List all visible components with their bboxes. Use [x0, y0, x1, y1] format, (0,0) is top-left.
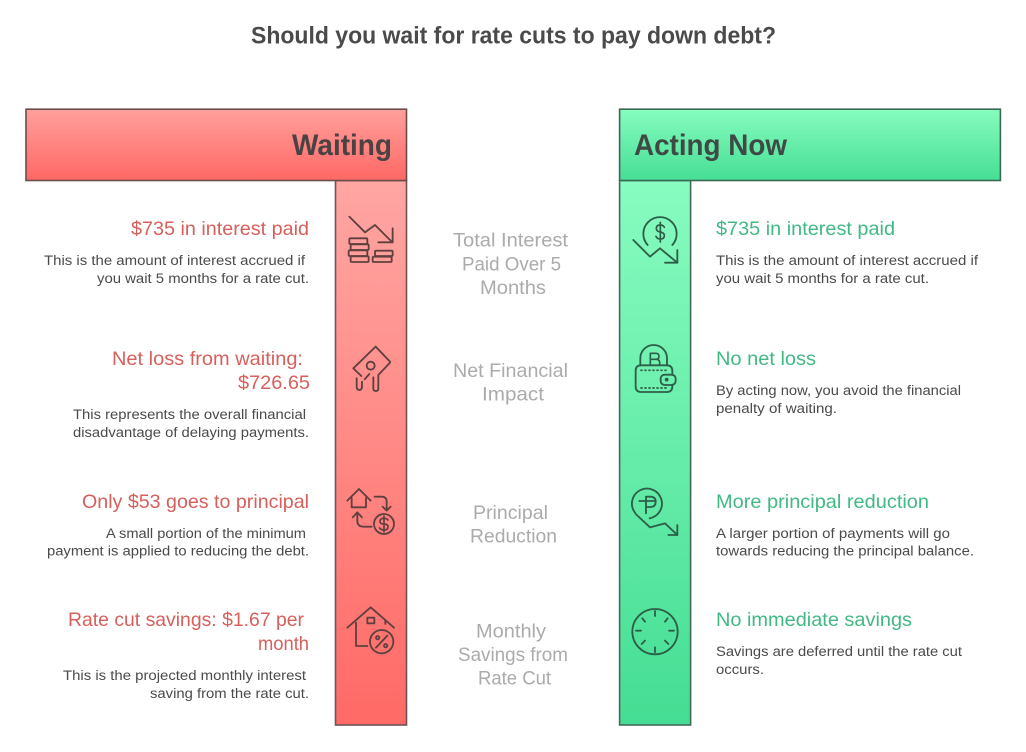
acting item: principal reduction: More principal reduction	[716, 491, 929, 513]
icon: clock face	[632, 609, 678, 654]
icon: house with percent	[347, 607, 394, 653]
waiting item: interest paid: This is the amount of interest accrued if	[44, 253, 305, 269]
center label: net financial impact: Impact	[482, 384, 545, 406]
acting now heading: Acting Now	[634, 129, 788, 162]
acting item: no immediate savings: occurs.	[716, 662, 764, 678]
waiting item: rate cut savings: month	[258, 633, 309, 655]
center label: principal reduction	[470, 502, 557, 548]
waiting item: principal: A small portion of the minimum	[106, 526, 306, 542]
center label: monthly savings: Rate Cut	[478, 668, 552, 690]
center label: principal reduction: Reduction	[470, 526, 557, 548]
acting item: interest paid: This is the amount of interest accrued if	[716, 253, 978, 269]
waiting item: interest paid: $735 in interest paid	[131, 218, 309, 240]
acting item: no net loss: No net loss	[716, 348, 816, 370]
icon: melting banknote	[353, 347, 390, 391]
waiting item: net loss: This represents the overall financial	[73, 407, 306, 423]
waiting item: interest paid	[44, 218, 309, 287]
waiting item: rate cut savings: saving from the rate cut.	[150, 686, 309, 702]
center label: total interest: Total Interest	[453, 230, 569, 252]
center label: net financial impact: Net Financial	[453, 360, 568, 382]
acting item: no immediate savings: Savings are deferred until the rate cut	[716, 644, 962, 660]
center label: total interest	[453, 230, 569, 299]
waiting item: rate cut savings: Rate cut savings: $1.67 per	[68, 609, 305, 631]
center label: monthly savings	[458, 620, 568, 690]
waiting item: principal	[47, 491, 309, 560]
acting item: principal reduction	[716, 491, 974, 560]
icon: wallet with coin	[636, 345, 676, 392]
center label: monthly savings: Monthly	[476, 620, 546, 642]
waiting heading: Waiting	[292, 129, 392, 162]
center label: total interest: Months	[480, 277, 546, 299]
panel: waiting	[26, 109, 406, 725]
icon: ruble coin with falling arrow	[632, 489, 677, 535]
center label: total interest: Paid Over 5	[462, 254, 561, 276]
waiting item: net loss: $726.65	[238, 372, 310, 394]
icon: falling chart with coins	[349, 217, 393, 262]
acting item: interest paid: you wait 5 months for a rate cut.	[716, 271, 929, 287]
title: Should you wait for rate cuts to pay down debt?	[251, 22, 776, 50]
acting item: no net loss	[716, 348, 961, 417]
icon: dollar coin with falling arrow	[633, 217, 677, 263]
acting item: principal reduction: A larger portion of payments will go	[716, 526, 950, 542]
center label: principal reduction: Principal	[473, 502, 548, 524]
center label: monthly savings: Savings from	[458, 644, 568, 666]
waiting header bar	[26, 109, 406, 180]
acting now column	[620, 180, 691, 725]
acting item: interest paid: $735 in interest paid	[716, 218, 895, 240]
panel: acting now	[620, 109, 1000, 725]
waiting item: principal: payment is applied to reducing the debt.	[47, 544, 309, 560]
waiting item: net loss	[73, 348, 310, 441]
acting item: no net loss: penalty of waiting.	[716, 401, 837, 417]
acting item: principal reduction: towards reducing the principal balance.	[716, 544, 974, 560]
acting item: no immediate savings: No immediate savings	[716, 609, 912, 631]
waiting item: rate cut savings: This is the projected monthly interest	[63, 668, 306, 684]
waiting item: principal: Only $53 goes to principal	[82, 491, 309, 513]
icon: house and money exchange	[347, 489, 394, 534]
acting item: no net loss: By acting now, you avoid the financial	[716, 383, 961, 399]
acting item: no immediate savings	[716, 609, 962, 678]
waiting item: net loss: Net loss from waiting:	[112, 348, 303, 370]
waiting item: rate cut savings	[63, 609, 309, 702]
acting now header bar	[620, 109, 1000, 180]
waiting item: interest paid: you wait 5 months for a rate cut.	[97, 271, 309, 287]
waiting item: net loss: disadvantage of delaying payments.	[73, 425, 309, 441]
waiting column	[336, 180, 406, 725]
center label: net financial impact	[453, 360, 568, 406]
acting item: interest paid	[716, 218, 978, 287]
